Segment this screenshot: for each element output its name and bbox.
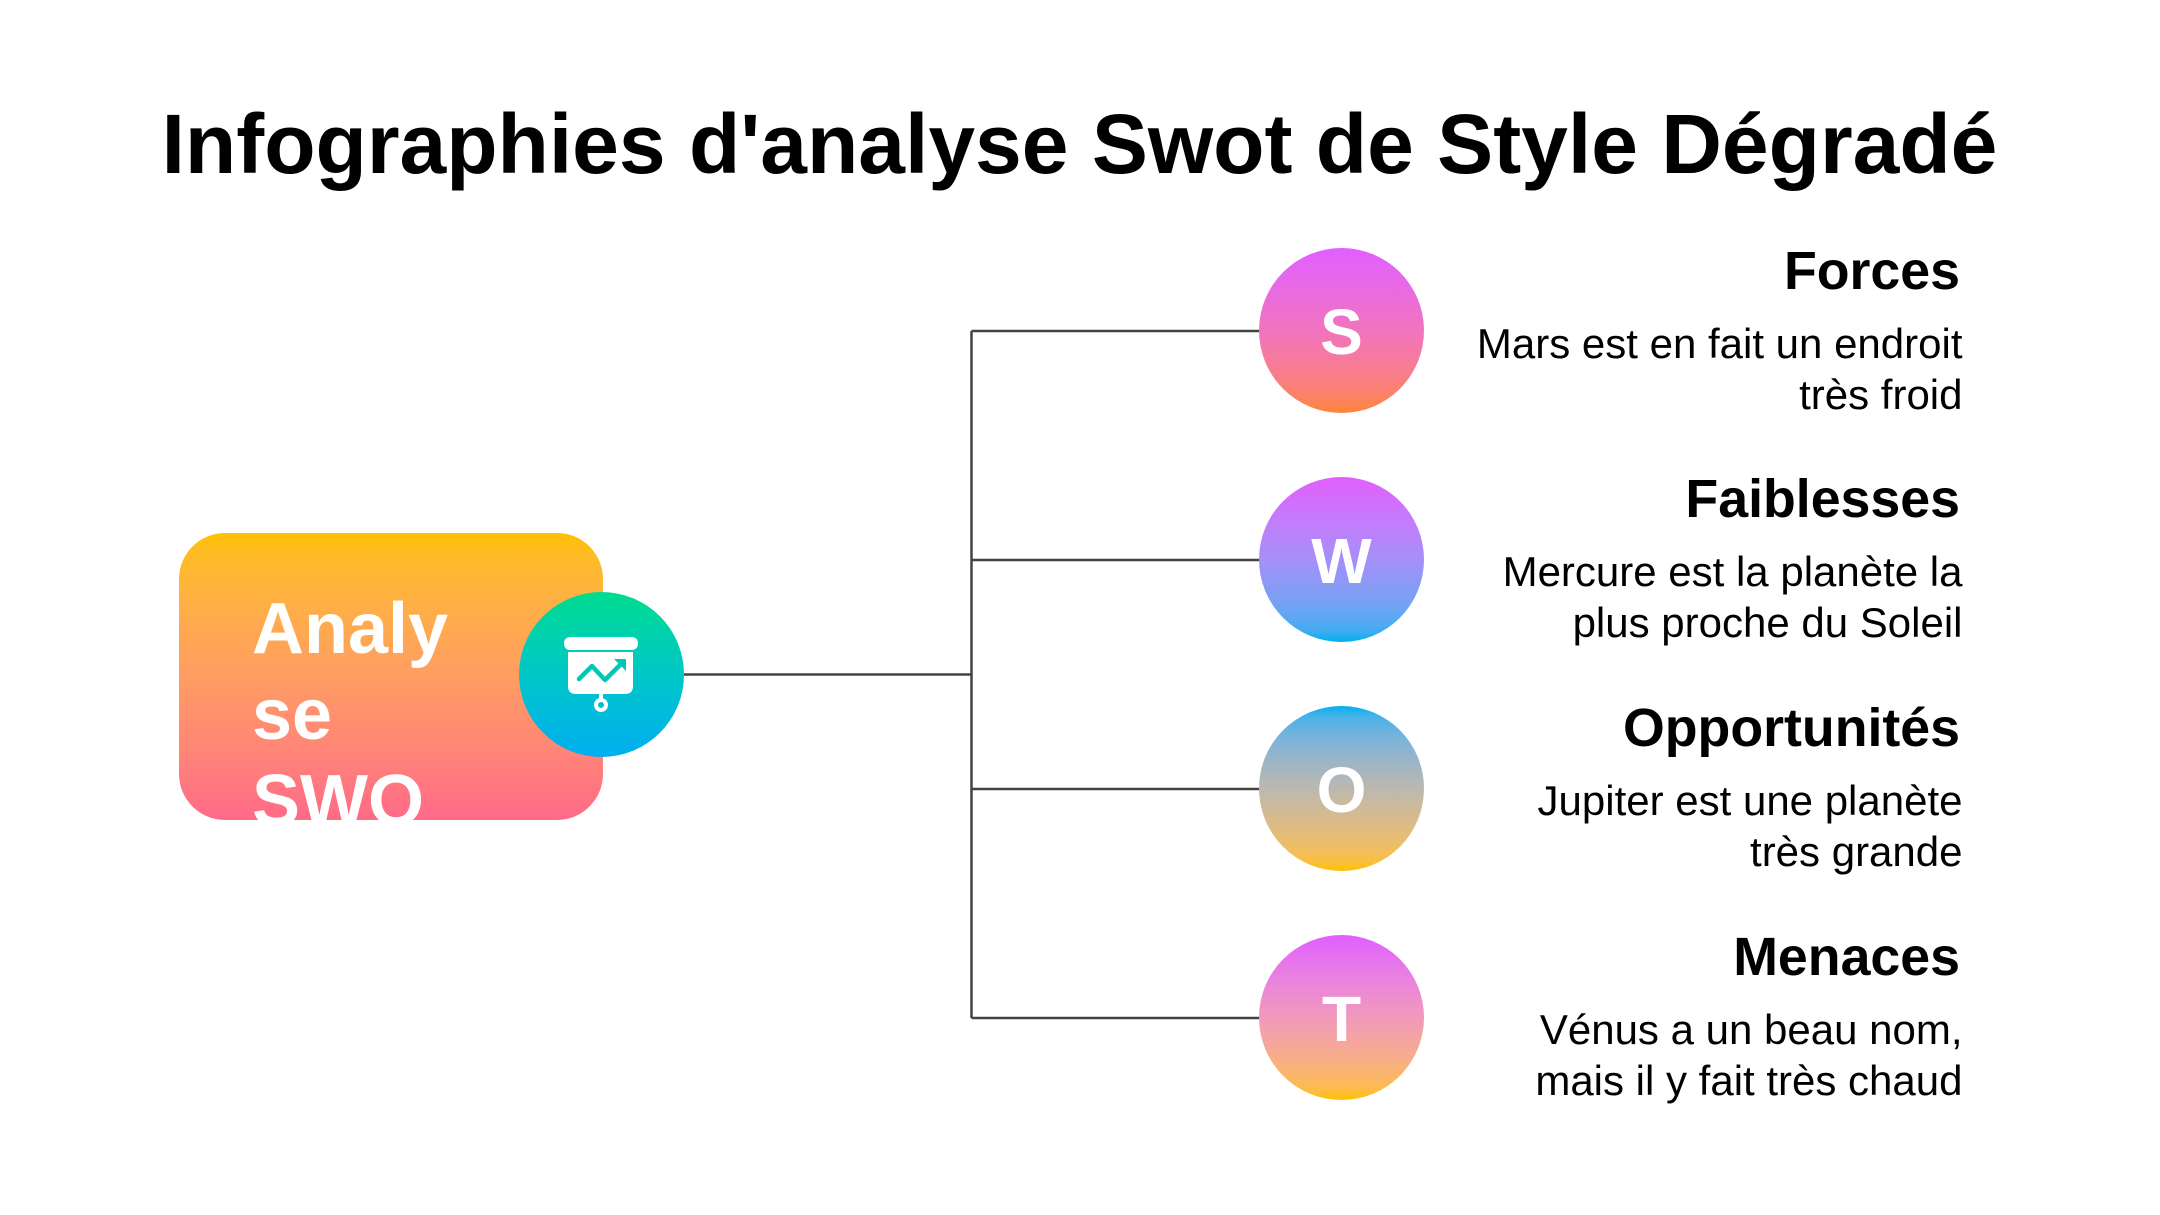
text: Opportunités [1538,698,1962,875]
title: Infographies d'analyse Swot de Style Dégradé [162,97,1997,191]
text: Opportunités: Jupiter est une planète [1538,777,1962,824]
text: Faiblesses: Mercure est la planète la [1503,548,1962,595]
circle: T [1259,935,1424,1100]
circle: T: T [1322,983,1361,1055]
text: Forces: très froid [1799,371,1962,418]
text: Menaces: mais il y fait très chaud [1535,1057,1962,1104]
panel: SWOT analysis box [179,533,603,820]
circle: S [1259,248,1424,413]
circle: W: W [1311,525,1372,597]
circle: W [1259,477,1424,642]
text: Forces [1477,241,1962,418]
circle: S: S [1320,296,1363,368]
icon: presentation board [564,637,638,712]
circle: O: O [1317,754,1366,826]
box label [252,588,448,820]
text: Menaces [1535,927,1962,1104]
text: Forces: Mars est en fait un endroit [1477,320,1962,367]
box label: Analy [252,588,448,668]
hub circle [519,592,684,757]
text: Faiblesses: plus proche du Soleil [1573,599,1962,646]
circle: O [1259,706,1424,871]
text: Opportunités: très grande [1750,828,1962,875]
text: Menaces: Vénus a un beau nom, [1540,1006,1962,1053]
text: Menaces: Menaces [1733,927,1960,987]
connector lines [684,330,1260,1020]
text: Forces: Forces [1784,241,1960,301]
text: Faiblesses [1503,469,1962,646]
text: Faiblesses: Faiblesses [1685,469,1960,529]
box label: se [252,675,332,755]
text: Opportunités: Opportunités [1623,698,1960,758]
